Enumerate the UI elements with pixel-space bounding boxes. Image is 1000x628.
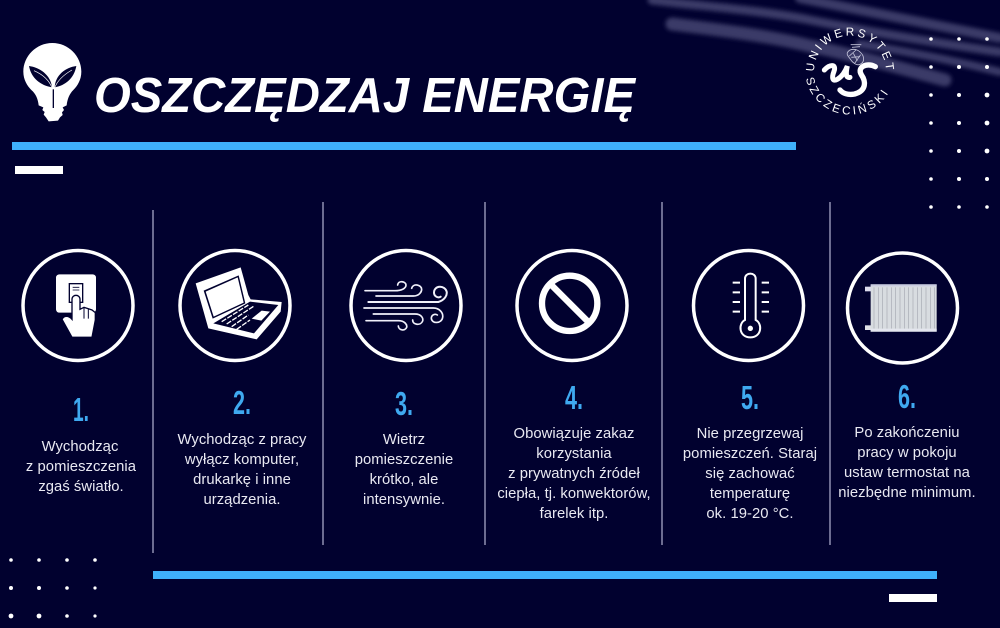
text: step 5: pomieszczeń. Staraj xyxy=(683,446,817,462)
text: step 1: Wychodząc xyxy=(42,439,119,455)
text: step 5: ok. 19-20 °C. xyxy=(706,506,794,522)
panel: step 3 xyxy=(351,250,461,508)
text: step 2: urządzenia. xyxy=(203,492,281,508)
text: step 6: Po zakończeniu xyxy=(854,425,960,441)
text: step 3: krótko, ale xyxy=(370,472,438,488)
text: step 2: wyłącz komputer, xyxy=(184,452,299,468)
dot grid: top right xyxy=(929,37,989,209)
bottom blue bar xyxy=(153,571,937,579)
bottom white accent bar xyxy=(889,594,937,602)
text: step 1: z pomieszczenia xyxy=(26,459,137,475)
text: step 6: pracy w pokoju xyxy=(857,445,957,461)
panel: step 4 xyxy=(497,250,651,522)
number 1: 1. xyxy=(73,391,89,428)
panel: step 2 xyxy=(177,250,307,508)
number 2: 2. xyxy=(233,384,251,421)
text: step 4: farelek itp. xyxy=(540,506,608,522)
text: step 6: ustaw termostat na xyxy=(844,465,971,481)
icon: wind xyxy=(364,282,447,330)
text: step 2: Wychodząc z pracy xyxy=(177,432,307,448)
brush streaks xyxy=(652,0,1000,80)
university logo xyxy=(806,28,894,114)
number 6: 6. xyxy=(898,378,916,415)
title: OSZCZĘDZAJ ENERGIĘ xyxy=(94,69,636,123)
number 5: 5. xyxy=(741,379,759,416)
text: step 3: intensywnie. xyxy=(363,492,445,508)
icon: laptop xyxy=(196,267,282,339)
text: step 4: z prywatnych źródeł xyxy=(508,466,641,482)
text: step 3: pomieszczenie xyxy=(355,452,453,468)
text: step 2: drukarkę i inne xyxy=(193,472,291,488)
icon: prohibition sign xyxy=(542,276,597,331)
icon: thermometer xyxy=(733,274,769,337)
text: step 4: korzystania xyxy=(536,446,612,462)
number 4: 4. xyxy=(565,379,583,416)
panel: step 5 xyxy=(683,250,817,522)
text: step 4: Obowiązuje zakaz xyxy=(514,426,634,442)
text: step 3: Wietrz xyxy=(383,432,425,448)
text: step 5: Nie przegrzewaj xyxy=(697,426,803,442)
panel: step 1 xyxy=(23,250,137,495)
panel: step 6 xyxy=(838,253,976,501)
icon: radiator xyxy=(865,284,937,332)
number 3: 3. xyxy=(395,385,413,422)
text: step 6: niezbędne minimum. xyxy=(838,485,976,501)
text: step 5: się zachować xyxy=(705,466,795,482)
text: step 4: ciepła, tj. konwektorów, xyxy=(497,486,651,502)
column dividers xyxy=(153,202,830,553)
university logo: SZCZECIŃSKI xyxy=(806,78,888,114)
dot grid: bottom left xyxy=(9,558,97,618)
top white accent bar xyxy=(15,166,63,174)
university logo: UNIWERSYTET xyxy=(806,28,894,70)
top blue bar xyxy=(12,142,796,150)
icon: hand pressing light switch xyxy=(56,274,96,337)
text: step 1: zgaś światło. xyxy=(38,479,124,495)
icon: lightbulb with leaves xyxy=(23,43,81,121)
text: step 5: temperaturę xyxy=(710,486,790,502)
